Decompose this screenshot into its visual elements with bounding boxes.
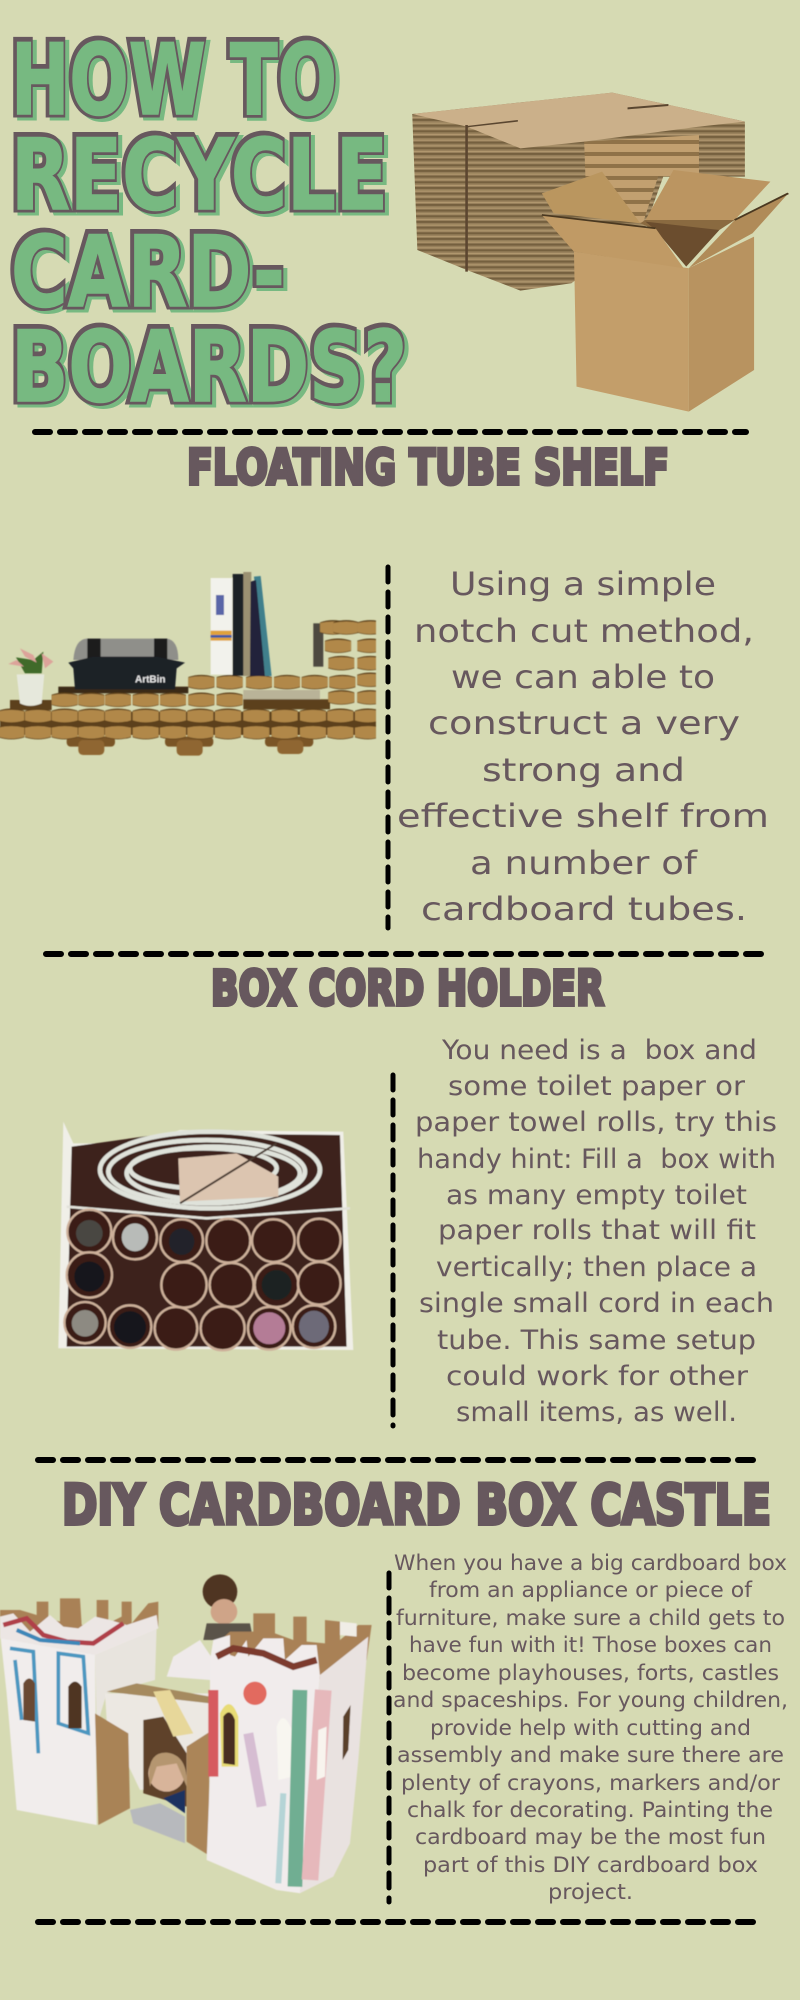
text: cord holder description: some toilet paper or (448, 1071, 746, 1102)
text: castle description: When you have a big cardboard box (394, 1551, 787, 1575)
text: cord holder description: as many empty toilet (446, 1180, 747, 1211)
text: castle description: become playhouses, forts, castles (402, 1661, 779, 1685)
right tower (167, 1613, 372, 1893)
text: cord holder description: single small cord in each (419, 1288, 774, 1319)
text: castle description: have fun with it! Those boxes can (409, 1633, 772, 1657)
text: shelf description: cardboard tubes. (421, 890, 747, 928)
text: shelf description: we can able to (451, 658, 715, 696)
divider (46, 951, 763, 957)
text: castle description: part of this DIY cardboard box (423, 1853, 758, 1877)
title: BOARDS? (10, 310, 406, 424)
title (10, 23, 410, 427)
title: CARD- (10, 215, 284, 329)
text: cord holder description: paper towel rolls, try this (415, 1107, 777, 1138)
title: BOARDS? (11, 311, 407, 425)
text: castle description (393, 1551, 788, 1904)
text: castle description: assembly and make sure there are (397, 1743, 784, 1767)
shelf tubes (0, 620, 383, 756)
text: castle description: furniture, make sure a child gets to (396, 1606, 785, 1630)
middle gate (95, 1683, 210, 1855)
vase with flowers (8, 648, 53, 706)
divider (35, 429, 746, 435)
image: castle (0, 1574, 372, 1893)
stored cords (72, 1220, 329, 1344)
vertical divider: cord holder (390, 1075, 396, 1426)
boy (203, 1574, 253, 1640)
title: CARD- (14, 218, 288, 332)
text: castle description: and spaceships. For young children, (393, 1688, 788, 1712)
title: RECYCLE (14, 121, 391, 235)
text: cord holder description (415, 1035, 777, 1428)
tube circles (64, 1210, 341, 1350)
title: RECYCLE (10, 118, 387, 232)
image: box cord holder (58, 1122, 353, 1350)
text: shelf description: effective shelf from (397, 797, 769, 835)
text: castle description: plenty of crayons, markers and/or (401, 1771, 780, 1795)
left tower (0, 1598, 158, 1825)
text: shelf description: Using a simple (450, 565, 716, 603)
text: shelf description: construct a very (428, 704, 740, 742)
text: shelf description (397, 565, 769, 928)
text: castle description: from an appliance or piece of (429, 1578, 753, 1602)
art bin box (68, 639, 185, 689)
art bin box: ArtBin (135, 675, 166, 686)
text: castle description: cardboard may be the most fun (415, 1825, 766, 1849)
text: cord holder description: You need is a box and (441, 1035, 757, 1066)
title: HOW TO (11, 24, 337, 138)
text: cord holder description: paper rolls that will fit (438, 1215, 756, 1246)
text: shelf description: notch cut method, (414, 612, 754, 650)
divider (38, 1457, 755, 1463)
books (211, 572, 272, 676)
cords and roll (100, 1132, 320, 1208)
title: RECYCLE (11, 119, 388, 233)
text: cord holder description: small items, as well. (456, 1397, 737, 1428)
text: cord holder description: handy hint: Fill a box with (417, 1144, 776, 1175)
title: BOARDS? (14, 313, 410, 427)
heading: box cord holder: BOX CORD HOLDER (211, 961, 604, 1017)
text: castle description: chalk for decorating. Painting the (407, 1798, 773, 1822)
vertical divider: castle (386, 1573, 392, 1902)
image: cardboard stack and open box (412, 93, 788, 412)
vertical divider: shelf (386, 567, 390, 928)
text: shelf description: a number of (470, 844, 698, 882)
title: HOW TO (10, 23, 336, 137)
text: shelf description: strong and (482, 751, 685, 789)
title: CARD- (11, 216, 285, 330)
text: castle description: provide help with cutting and (430, 1716, 751, 1740)
text: cord holder description: vertically; then place a (436, 1252, 757, 1283)
text: cord holder description: could work for other (446, 1361, 749, 1392)
open box (542, 170, 788, 412)
flat cardboard stack (412, 93, 745, 291)
box (58, 1122, 353, 1350)
text: castle description: project. (548, 1880, 633, 1904)
text: cord holder description: tube. This same setup (437, 1325, 756, 1356)
title: HOW TO (14, 26, 340, 140)
heading: floating tube shelf: FLOATING TUBE SHELF (187, 440, 669, 496)
divider (38, 1919, 755, 1925)
image: tube shelf (0, 572, 383, 756)
